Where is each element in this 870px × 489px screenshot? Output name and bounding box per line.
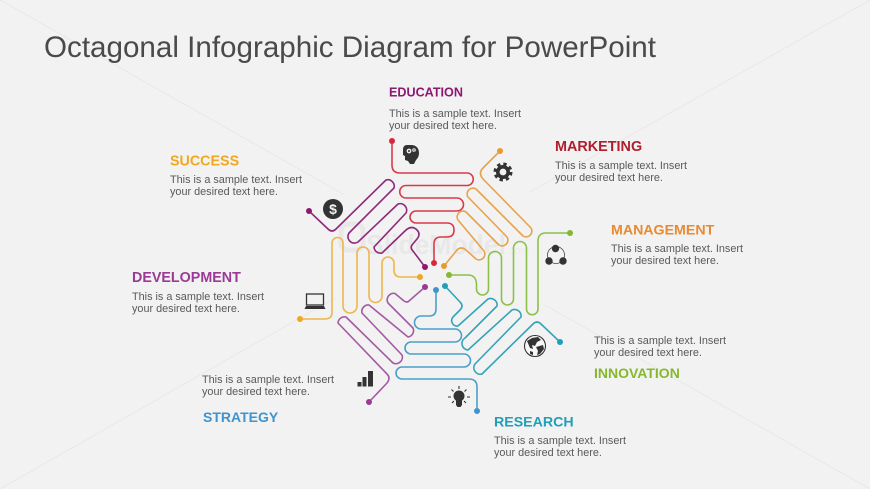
watermark: SlideModel [366,229,506,260]
icon: three connected circles [545,245,567,265]
block: marketing: MARKETING [555,139,642,155]
block: marketing: This is a sample text. Insert [555,160,687,172]
icon: head with gears [403,145,419,164]
octagonal line diagram [297,138,573,414]
block: innovation: your desired text here. [594,347,702,359]
block: education: your desired text here. [389,120,497,132]
title: Octagonal Infographic Diagram for PowerPoint [44,31,656,64]
block: research [494,414,626,459]
icon: dollar [323,199,343,219]
block: development: DEVELOPMENT [132,270,241,286]
line: green [446,230,573,315]
line: dark purple [306,180,428,270]
block: management: your desired text here. [611,255,719,267]
block: strategy: your desired text here. [202,386,310,398]
block: strategy: STRATEGY [203,409,279,425]
block: innovation: INNOVATION [594,365,680,381]
icon: bar chart [358,371,373,386]
block: strategy [202,374,334,425]
block: management: This is a sample text. Insert [611,243,743,255]
block: development [132,270,264,315]
icon: gear [495,164,511,180]
block: management: MANAGEMENT [611,222,715,238]
block: innovation: This is a sample text. Insert [594,335,726,347]
block: education: EDUCATION [389,86,463,100]
line: teal [442,283,563,374]
line: blue [396,287,480,414]
block: marketing [555,139,687,184]
block: research: RESEARCH [494,414,574,430]
block: success: This is a sample text. Insert [170,174,302,186]
watermark: .com [506,245,530,257]
line: light purple [338,284,428,405]
block: development: This is a sample text. Insert [132,291,264,303]
icon: dollar: $ [329,201,337,217]
line: yellow [297,238,423,322]
block: management [611,222,743,267]
block: success: your desired text here. [170,186,278,198]
block: innovation [594,335,726,381]
block: research: This is a sample text. Insert [494,435,626,447]
icon: laptop [304,294,326,309]
block: success: SUCCESS [170,154,239,170]
block: research: your desired text here. [494,447,602,459]
line: red [389,138,473,266]
icon: light bulb [448,386,470,407]
block: success [170,154,302,198]
block: development: your desired text here. [132,303,240,315]
block: marketing: your desired text here. [555,172,663,184]
block: education [389,86,521,132]
line: orange [441,148,532,269]
block: education: This is a sample text. Insert [389,108,521,120]
block: strategy: This is a sample text. Insert [202,374,334,386]
icon: globe [524,336,546,356]
watermark [341,224,530,260]
